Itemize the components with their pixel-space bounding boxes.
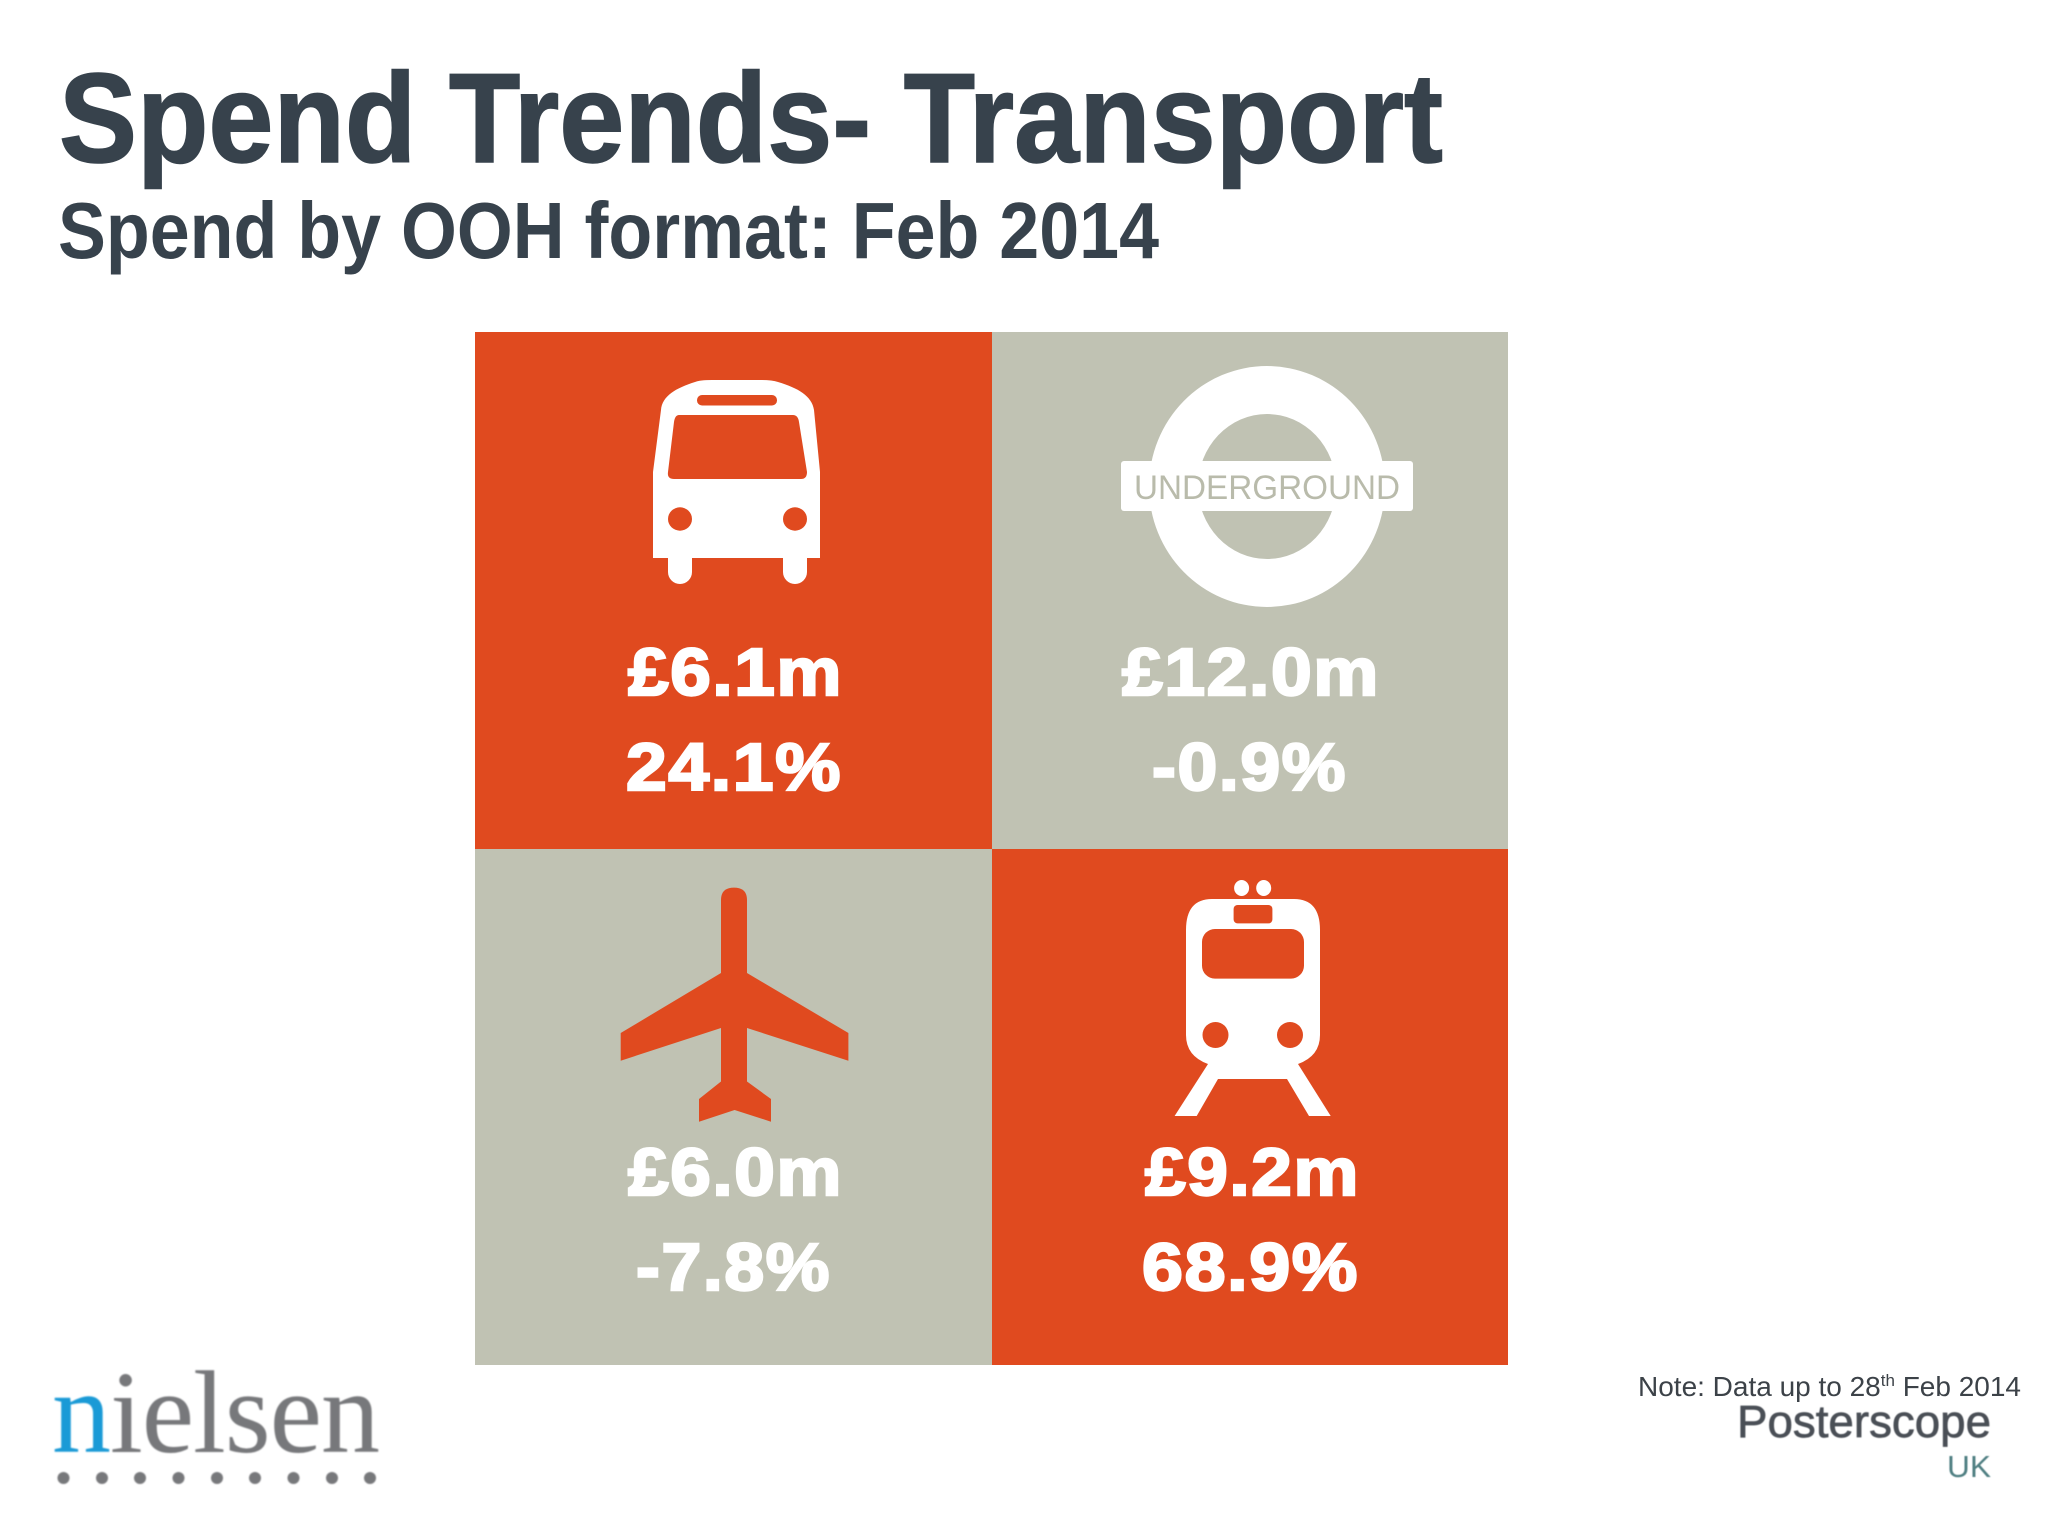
airport change percentage: -7.8% bbox=[636, 1230, 831, 1305]
rail spend value: £9.2m bbox=[1145, 1135, 1360, 1210]
rail change percentage: 68.9% bbox=[1142, 1230, 1359, 1305]
icon: plane bbox=[621, 888, 848, 1122]
panel: bus bbox=[475, 332, 992, 849]
logo: posterscope: UK bbox=[1947, 1449, 1991, 1484]
subtitle: Spend by OOH format: Feb 2014 bbox=[58, 186, 1159, 275]
note: th bbox=[1881, 1371, 1895, 1390]
airport spend value: £6.0m bbox=[628, 1135, 843, 1210]
panel: underground bbox=[992, 332, 1508, 849]
title: Spend Trends- Transport bbox=[59, 47, 1443, 189]
note: Note: Data up to 28 bbox=[1638, 1371, 1881, 1402]
icon: underground roundel: UNDERGROUND bbox=[1134, 469, 1400, 507]
logo: nielsen: nielsen bbox=[52, 1347, 380, 1478]
bus spend value: £6.1m bbox=[628, 635, 843, 710]
panel: rail bbox=[992, 849, 1508, 1365]
icon: train bbox=[1175, 880, 1331, 1116]
icon: underground roundel bbox=[1121, 366, 1413, 607]
bus change percentage: 24.1% bbox=[626, 730, 842, 805]
logo: posterscope bbox=[1737, 1396, 1991, 1484]
underground spend value: £12.0m bbox=[1122, 635, 1380, 710]
underground change percentage: -0.9% bbox=[1152, 730, 1347, 805]
logo: posterscope: Posterscope bbox=[1737, 1396, 1991, 1447]
panel: airport bbox=[475, 849, 992, 1365]
note: Feb 2014 bbox=[1895, 1371, 2021, 1402]
icon: bus bbox=[653, 380, 820, 584]
